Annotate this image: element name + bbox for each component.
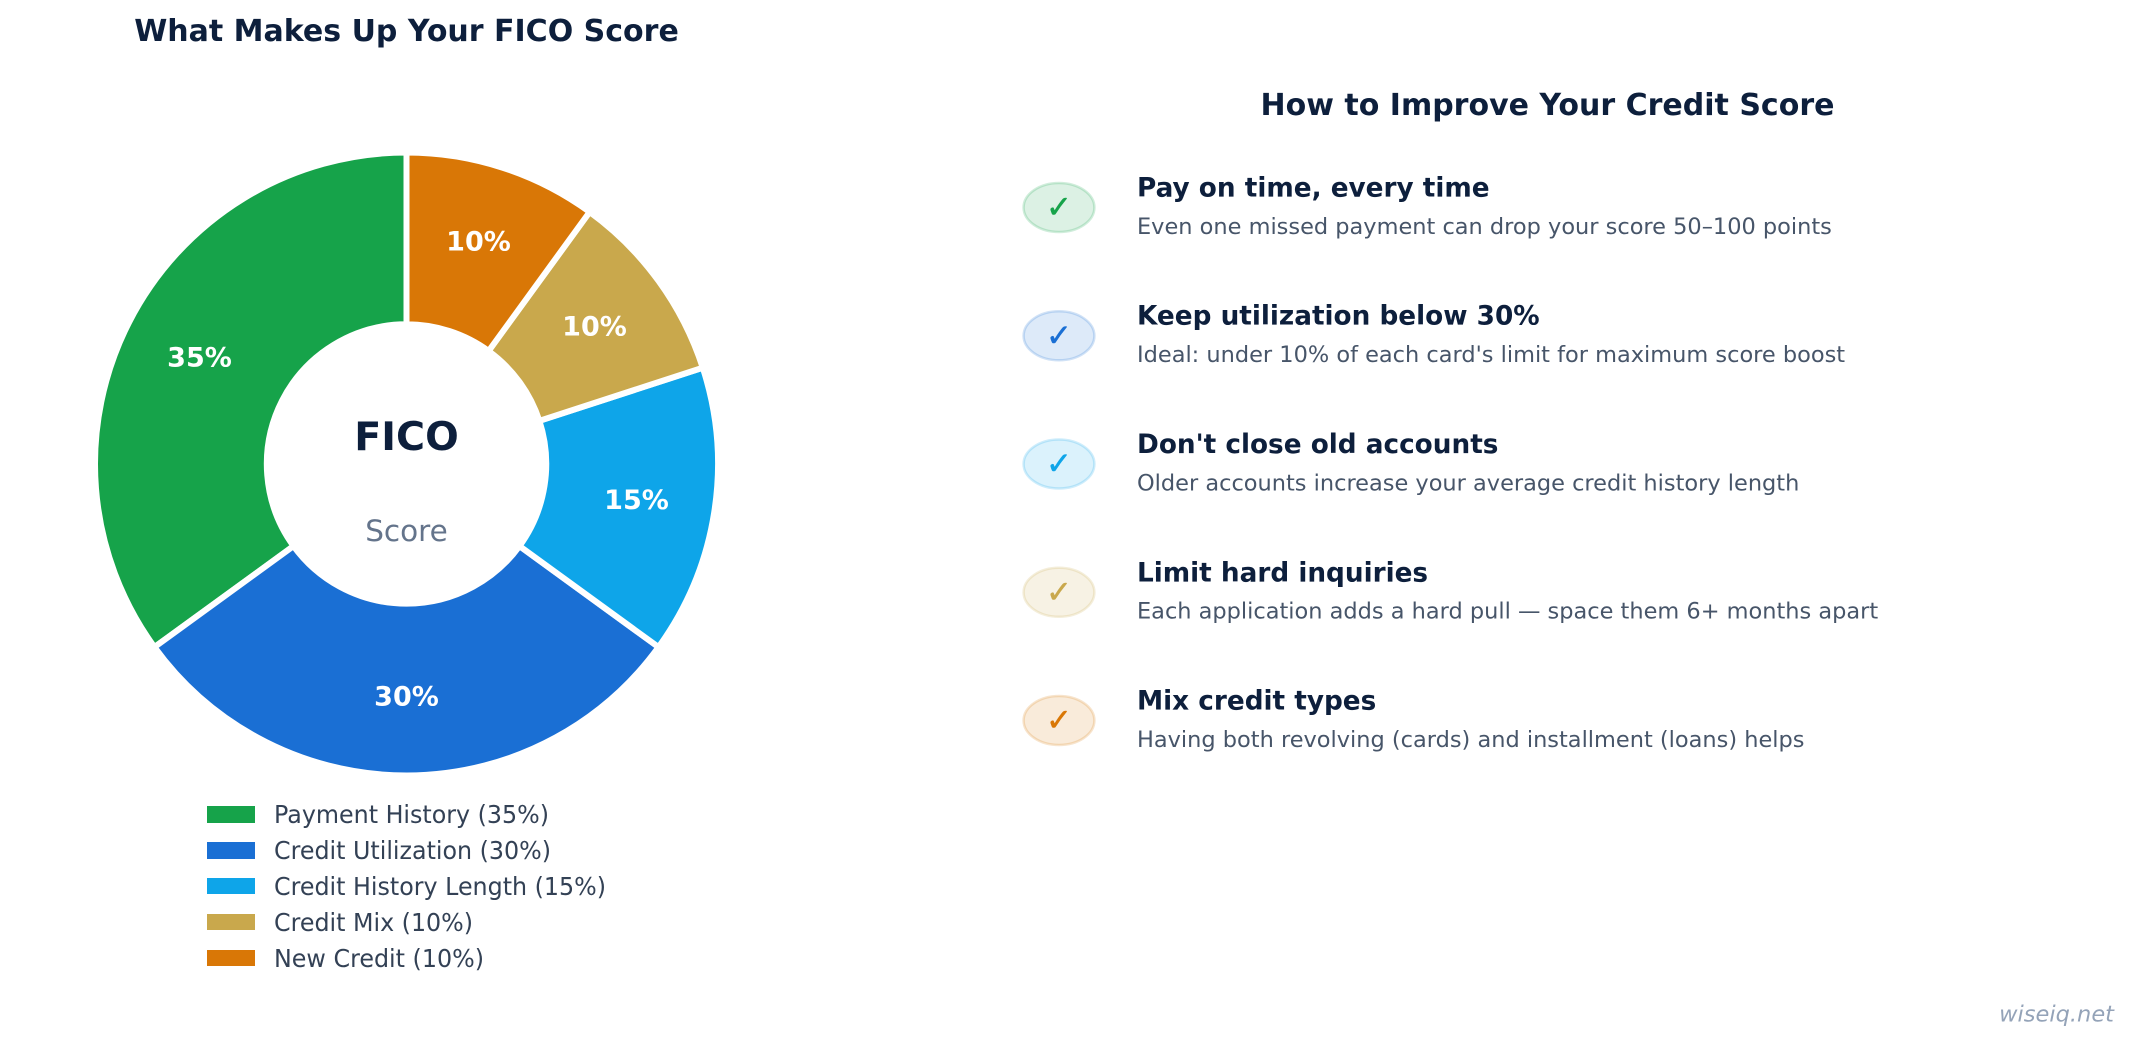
tip 5: Mix credit types bbox=[1137, 687, 1376, 717]
percent labels: 15% bbox=[604, 485, 669, 516]
tip 5: Having both revolving (cards) and installment (loans) helps bbox=[1137, 727, 1804, 753]
percent labels: 10% bbox=[562, 312, 627, 343]
donut center label: Score bbox=[365, 514, 448, 548]
donut center label bbox=[354, 414, 459, 548]
percent labels: 10% bbox=[446, 227, 511, 258]
legend bbox=[207, 800, 606, 973]
wedge: credit utilization 30% bbox=[154, 546, 658, 775]
icon: orange check: ✓ bbox=[1046, 702, 1072, 738]
icon: gold check: ✓ bbox=[1046, 574, 1072, 610]
wedge: credit mix 10% bbox=[489, 212, 703, 421]
tip 3: Older accounts increase your average credit history length bbox=[1137, 470, 1799, 496]
donut chart bbox=[95, 152, 718, 775]
tip 1: Pay on time, every time bbox=[1137, 173, 1490, 203]
percent labels: 30% bbox=[374, 682, 439, 713]
percent labels: 35% bbox=[167, 343, 232, 374]
tip 1: Even one missed payment can drop your score 50–100 points bbox=[1137, 214, 1832, 240]
icon: blue check: ✓ bbox=[1046, 318, 1072, 354]
legend: Credit Mix (10%) bbox=[274, 908, 473, 937]
title: fico breakdown: What Makes Up Your FICO Score bbox=[134, 14, 679, 49]
tip 2: Keep utilization below 30% bbox=[1137, 302, 1540, 332]
legend: Credit Utilization (30%) bbox=[274, 836, 551, 865]
tip 2 bbox=[1024, 302, 1845, 368]
donut center label: FICO bbox=[354, 414, 459, 460]
tip 1 bbox=[1024, 173, 1832, 240]
icon: green check: ✓ bbox=[1046, 190, 1072, 226]
tip 2: Ideal: under 10% of each card's limit for maximum score boost bbox=[1137, 342, 1845, 368]
tip 4: Each application adds a hard pull — space them 6+ months apart bbox=[1137, 599, 1878, 625]
watermark: wiseiq.net bbox=[1999, 1002, 2115, 1028]
icon: blue check bbox=[1024, 311, 1094, 360]
heading: how to improve: How to Improve Your Credit Score bbox=[1261, 88, 1834, 123]
wedge: credit history length 15% bbox=[520, 368, 718, 647]
tip 5 bbox=[1024, 687, 1804, 753]
tip 4 bbox=[1024, 558, 1878, 625]
tip 3: Don't close old accounts bbox=[1137, 430, 1498, 460]
tip 4: Limit hard inquiries bbox=[1137, 558, 1428, 588]
icon: green check bbox=[1024, 183, 1094, 232]
legend: New Credit (10%) bbox=[274, 944, 484, 973]
wedge: new credit 10% bbox=[406, 152, 590, 351]
legend: Credit History Length (15%) bbox=[274, 872, 606, 901]
tip 3 bbox=[1024, 430, 1799, 496]
legend: Payment History (35%) bbox=[274, 800, 549, 829]
icon: light blue check: ✓ bbox=[1046, 446, 1072, 482]
wedge: payment history 35% bbox=[95, 152, 406, 647]
icon: orange check bbox=[1024, 696, 1094, 745]
icon: light blue check bbox=[1024, 440, 1094, 488]
icon: gold check bbox=[1024, 568, 1094, 617]
percent labels bbox=[167, 227, 669, 713]
